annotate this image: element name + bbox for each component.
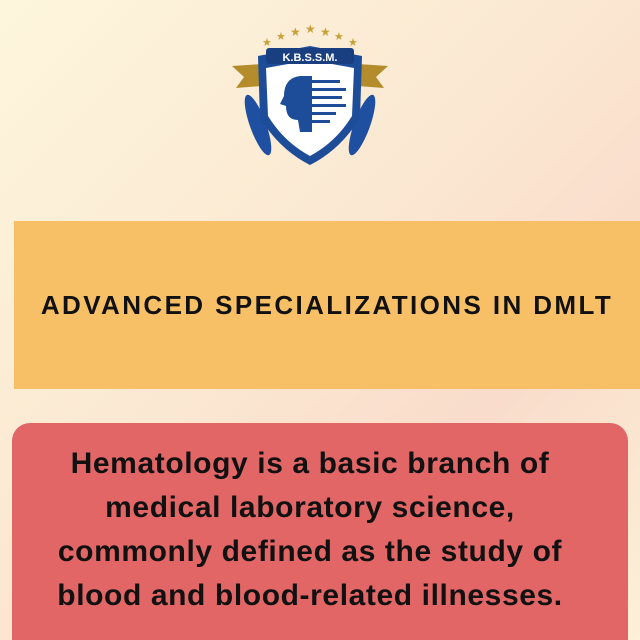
ribbons bbox=[232, 64, 388, 88]
shield bbox=[258, 46, 362, 165]
icon: stars bbox=[262, 22, 358, 49]
icon: stars: ★ bbox=[290, 25, 301, 39]
text box: hematology: medical laboratory science, bbox=[105, 491, 515, 524]
icon: stars: ★ bbox=[348, 37, 358, 49]
laurels bbox=[240, 92, 380, 158]
shield: K.B.S.S.M. bbox=[282, 52, 338, 64]
title band: ADVANCED SPECIALIZATIONS IN DMLT bbox=[41, 290, 613, 320]
text box: hematology: blood and blood-related illnesses. bbox=[57, 579, 563, 612]
icon: stars: ★ bbox=[334, 31, 344, 43]
logo bbox=[232, 24, 388, 165]
text box: hematology: Hematology is a basic branch of bbox=[71, 447, 549, 480]
title band bbox=[14, 221, 640, 389]
text box: hematology: commonly defined as the study of bbox=[58, 535, 562, 568]
icon: stars: ★ bbox=[262, 37, 272, 49]
icon: stars: ★ bbox=[320, 25, 331, 39]
icon: stars: ★ bbox=[276, 31, 286, 43]
text box: hematology bbox=[12, 423, 628, 640]
